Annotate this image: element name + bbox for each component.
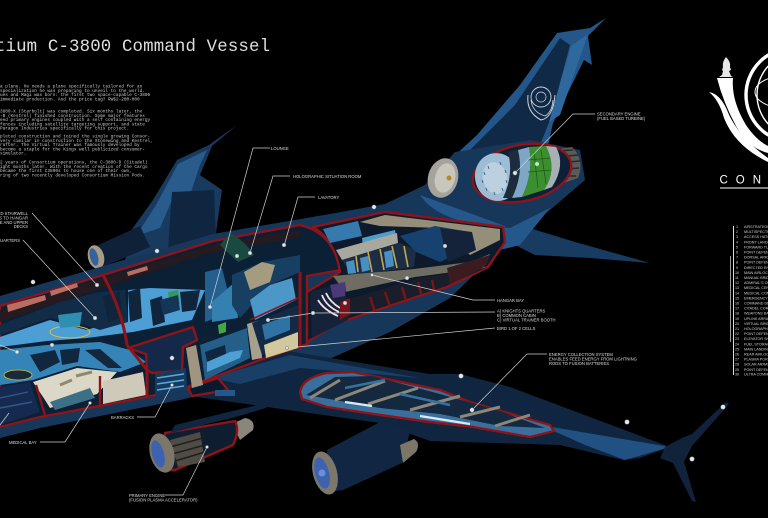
holographic room	[250, 278, 296, 320]
green turbine stage	[522, 146, 552, 197]
secondary engine exhaust	[550, 147, 580, 185]
legend: numbered key: 13	[735, 286, 739, 290]
legend: numbered key	[730, 225, 768, 376]
legend: numbered key: 18	[735, 312, 739, 316]
legend: numbered key: 9	[736, 266, 738, 270]
legend: numbered key: 20	[735, 322, 739, 326]
label: secondary engine: SECONDARY ENGINE	[597, 112, 641, 116]
overhead tan wall	[360, 215, 500, 255]
text block: backstory	[0, 84, 153, 178]
cream side room	[103, 372, 146, 404]
upper deck blue floor	[0, 288, 205, 347]
text block: backstory: eed primary engines coupled with a self containing energy	[0, 118, 151, 123]
legend: numbered key: 4	[736, 240, 738, 244]
legend: numbered key: 28	[735, 363, 739, 367]
text block: backstory: became the first C3800s to house one of their own,	[0, 169, 132, 174]
label: energy collection: RODS TO FUSION BATTERIES	[549, 361, 609, 366]
label: lavatory: LAVATORY	[318, 195, 339, 200]
secondary engine intake	[423, 150, 478, 201]
label: cell count: BIRD 1 OF 2 CELLS	[497, 326, 536, 331]
main fuselage hull	[0, 140, 585, 438]
upper rooms	[205, 268, 232, 322]
label: quarters list: A) KNIGHTS QUARTERS	[497, 308, 545, 314]
white medical bay	[33, 368, 117, 408]
leader lines	[0, 114, 595, 495]
tail fin	[452, 18, 606, 170]
text block: backstory: specialization he was preparing to unveil to the world.	[0, 89, 145, 94]
blue rooms mid deck	[200, 328, 250, 380]
label: lounge: LOUNGE	[271, 146, 289, 151]
label: hangar bay: HANGAR BAY	[497, 298, 524, 303]
label: primary engine: PRIMARY ENGINE	[129, 493, 165, 498]
legend: numbered key: 1	[736, 225, 738, 229]
label: energy collection: ENERGY COLLECTION SYSTEM	[549, 352, 613, 357]
legend: numbered key: 11	[735, 276, 739, 280]
lower bulkhead rooms	[252, 305, 298, 355]
hangar floor	[333, 254, 490, 292]
legend: numbered key: 10	[735, 271, 739, 275]
tail emblem	[528, 87, 555, 120]
text block: backstory: a plane. He needs a plane specifically tailored for an	[0, 84, 143, 90]
energy collection cutaway in wing	[300, 372, 554, 437]
logo bishop piece	[719, 57, 733, 77]
label: energy collection: ENABLES FEED ENERGY FROM LIGHTNING	[549, 356, 637, 362]
far-side wing with rear engine	[85, 125, 237, 271]
text block: backstory: fences including satellite targeting support, and state	[0, 122, 145, 127]
turbine rear	[544, 146, 560, 190]
text block: backstory: -B (Kestrel) finished construction. Some major features	[0, 114, 145, 119]
dark vehicle	[400, 226, 474, 262]
legend: numbered key: 27	[735, 358, 739, 362]
location markers	[15, 171, 725, 461]
hangar racks	[342, 243, 416, 276]
legend: numbered key: 25	[735, 347, 739, 351]
dark central block	[128, 327, 197, 373]
text block: backstory: become a staple for the Kings well publicized consumer-	[0, 147, 145, 152]
upper deck furniture	[103, 288, 200, 326]
logo: Consortium emblem	[709, 48, 768, 188]
legend: numbered key: 19	[735, 317, 739, 321]
legend: numbered key: 22	[735, 332, 739, 336]
text block: backstory: 3800-X (Starbolt) was completed. Six months later, the	[0, 110, 143, 114]
lower bay frames	[345, 268, 486, 318]
text block: backstory: ight months later. With the recent creation of the Cargo	[0, 165, 148, 170]
turbine front	[470, 149, 524, 205]
cutaway: rear hangar	[307, 212, 505, 342]
legend: numbered key: 8	[736, 261, 738, 265]
secondary engine cutaway	[467, 135, 577, 211]
holo table	[50, 326, 90, 338]
primary engine cutaway	[145, 402, 270, 475]
label: stairwell: DECKS	[14, 224, 28, 229]
legend: numbered key: 15	[735, 296, 739, 300]
main wing	[187, 351, 670, 460]
text block: backstory: Paragon Industries specifically for this project.	[0, 127, 129, 132]
hatch plate	[336, 233, 398, 260]
legend: numbered key: 24	[735, 342, 739, 346]
legend: numbered key: 5	[736, 245, 738, 249]
legend: numbered key: 21	[735, 327, 739, 331]
legend: numbered key: 30	[735, 372, 739, 376]
far wing	[125, 125, 237, 262]
legend: numbered key: 29	[735, 368, 739, 372]
knights quarters	[310, 282, 348, 338]
turbine collar	[503, 150, 520, 198]
legend: numbered key: 17	[735, 307, 739, 311]
legend: numbered key: 6	[736, 250, 738, 254]
legend: numbered key: 2	[736, 230, 738, 234]
label: secondary engine: (FUEL BASED TURBINE)	[597, 116, 646, 121]
barracks	[155, 368, 187, 396]
text block: backstory: simulator.	[0, 152, 26, 157]
lower deck blue	[0, 342, 146, 385]
structural tan supports	[186, 345, 203, 388]
label: barracks: BARRACKS	[111, 415, 134, 420]
legend: numbered key: 14	[735, 291, 739, 295]
legend: numbered key: 7	[736, 256, 738, 260]
label: medical bay: MEDICAL BAY	[9, 440, 37, 445]
grand stair frame	[103, 275, 147, 397]
legend: numbered key: ULTRA COMM	[744, 372, 768, 376]
text block: backstory: pleted construction and joined the single growing Consor-	[0, 134, 150, 140]
primary engine outer	[308, 422, 418, 497]
logo rings	[746, 48, 768, 142]
legend: numbered key: 16	[735, 302, 739, 306]
legend: numbered key: 26	[735, 352, 739, 356]
legend: numbered key: 3	[736, 235, 738, 239]
far engine	[96, 226, 150, 268]
text block: backstory: rafter. The Virtual Trainer was famously developed by	[0, 143, 140, 148]
text block: backstory: very similar in construction to the Stonewing and Kestrel,	[0, 139, 153, 144]
text block: backstory: ues and Magi was born: the first two space-capable C-3800	[0, 93, 151, 98]
text block: backstory: ring of two recently developed Consortium Mission Pods.	[0, 173, 145, 178]
vertical bulkhead	[298, 272, 302, 350]
legend: numbered key: 23	[735, 337, 739, 341]
text block: backstory: immediate production. And the price tag? RW$2-200-000	[0, 97, 140, 102]
horizontal tail stabilizer	[510, 222, 650, 263]
forward cockpit room	[0, 382, 40, 425]
label: quarters list: C) VIRTUAL TRAINER BOOTH	[497, 318, 556, 323]
legend: numbered key: 12	[735, 281, 739, 285]
logo swooshes	[717, 78, 768, 153]
upper ceiling band	[0, 230, 300, 322]
text block: backstory: 2 years of Consortium operations, the C-3800-D (Citadel)	[0, 160, 148, 166]
label: holographic room: HOLOGRAPHIC SITUATION ROOM	[293, 174, 362, 179]
label: primary engine: (FUSION PLASMA ACCELERATOR)	[129, 498, 198, 503]
wingtip fins	[660, 402, 729, 502]
cutaway: forward cabin	[0, 225, 341, 427]
blue upper bays	[323, 221, 362, 243]
label: quarters list: B) COMMON CABIN	[497, 313, 536, 318]
